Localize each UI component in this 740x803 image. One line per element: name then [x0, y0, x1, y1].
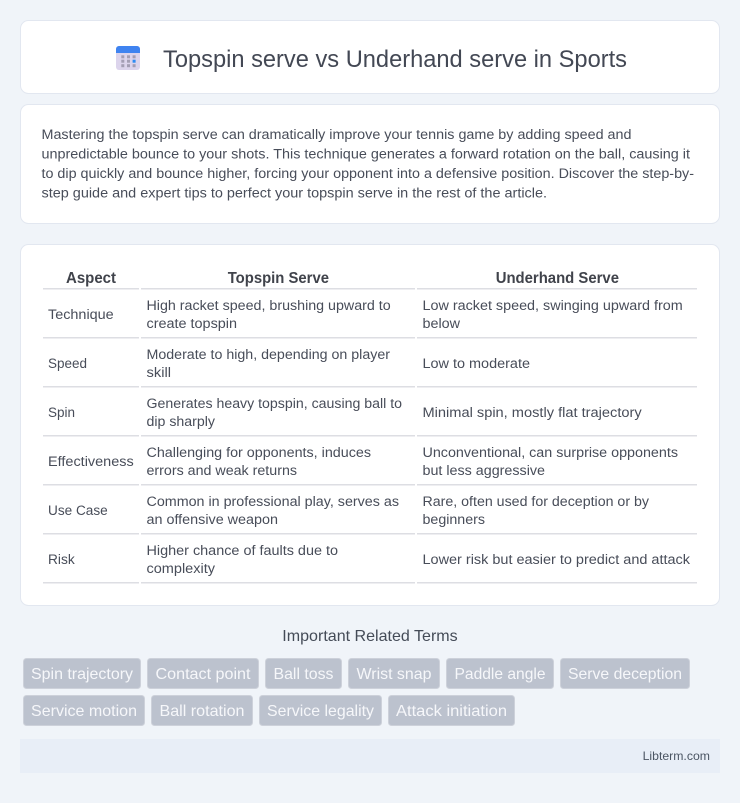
intro paragraph: unpredictable bounce to your shots. This technique generates a forward rotation on the ball, causing it	[42, 146, 690, 162]
heading: related terms: Important Related Terms	[282, 628, 458, 645]
intro paragraph	[42, 127, 694, 202]
row: Spin: Minimal spin, mostly flat trajectory	[422, 405, 643, 421]
row: Speed: Moderate to high, depending on player	[146, 347, 390, 363]
tag: Paddle angle	[446, 658, 554, 688]
row: Technique: Low racket speed, swinging upward from	[422, 298, 683, 314]
tag: Wrist snap	[348, 658, 440, 688]
row: Effectiveness: Challenging for opponents, induces	[146, 445, 371, 461]
intro paragraph: step guide and expert tips to perfect your topspin serve in the rest of the article.	[42, 186, 547, 202]
row: Use Case: Use Case	[48, 503, 108, 519]
row: Use Case: beginners	[422, 512, 485, 528]
row: Speed: Speed	[48, 356, 87, 372]
tag: Spin trajectory	[24, 658, 140, 688]
row: Technique: High racket speed, brushing upward to	[146, 298, 391, 314]
tag: Service legality: Service legality	[267, 703, 374, 720]
row: Technique: below	[422, 316, 461, 332]
intro paragraph: Mastering the topspin serve can dramatically improve your tennis game by adding speed and	[42, 127, 632, 143]
tag: Service motion: Service motion	[31, 703, 137, 720]
row: Effectiveness	[43, 445, 697, 486]
row: Effectiveness: Unconventional, can surprise opponents	[422, 445, 678, 461]
row: Risk	[43, 543, 697, 584]
tag: Ball rotation	[152, 696, 252, 726]
tag: Ball rotation: Ball rotation	[160, 703, 244, 720]
table header row: Topspin Serve	[228, 270, 329, 287]
tag: Wrist snap: Wrist snap	[356, 666, 432, 683]
panel: title header	[20, 20, 720, 94]
panel: comparison table	[20, 244, 720, 606]
tag: Service motion	[24, 696, 144, 726]
tag: Attack initiation: Attack initiation	[396, 703, 507, 720]
tag: Serve deception	[560, 658, 690, 688]
row: Spin: dip sharply	[146, 414, 216, 430]
row: Speed	[43, 347, 697, 388]
row: Use Case	[43, 494, 697, 534]
table header row: Aspect	[66, 270, 117, 287]
row: Speed: skill	[146, 365, 171, 381]
tag: Ball toss	[266, 658, 342, 688]
row: Risk: complexity	[146, 561, 216, 577]
icon: calendar	[116, 46, 140, 70]
row: Risk: Higher chance of faults due to	[146, 543, 338, 559]
footer credit: Libterm.com	[643, 749, 710, 763]
row: Effectiveness: Effectiveness	[48, 454, 134, 470]
row: Technique	[43, 298, 697, 338]
row: Use Case: an offensive weapon	[146, 512, 278, 528]
tag: Spin trajectory: Spin trajectory	[31, 666, 133, 683]
tag: Contact point: Contact point	[156, 666, 251, 683]
tag: Paddle angle: Paddle angle	[454, 666, 546, 683]
row: Use Case: Rare, often used for deception or by	[422, 494, 650, 510]
panel: related term tags	[24, 658, 690, 726]
row: Spin	[43, 396, 697, 436]
table header row	[43, 270, 697, 290]
tag: Ball toss: Ball toss	[274, 666, 334, 683]
row: Technique: create topspin	[146, 316, 237, 332]
row: Risk: Risk	[48, 552, 76, 568]
row: Technique: Technique	[48, 307, 114, 323]
panel: introduction	[20, 104, 720, 224]
row: Effectiveness: but less aggressive	[422, 463, 545, 479]
table header row: Underhand Serve	[496, 270, 619, 287]
tag: Contact point	[148, 658, 258, 688]
intro paragraph: to dip quickly and bounce higher, forcing your opponent into a defensive position. Discover the step-by-	[42, 166, 694, 182]
tag: Serve deception: Serve deception	[568, 666, 682, 683]
row: Risk: Lower risk but easier to predict and attack	[422, 552, 691, 568]
title: Topspin serve vs Underhand serve in Sports	[163, 46, 627, 73]
row: Effectiveness: errors and weak returns	[146, 463, 297, 479]
row: Spin: Generates heavy topspin, causing ball to	[146, 396, 402, 412]
row: Use Case: Common in professional play, serves as	[146, 494, 399, 510]
footer bar	[20, 739, 720, 773]
row: Speed: Low to moderate	[422, 356, 530, 372]
tag: Service legality	[260, 696, 382, 726]
tag: Attack initiation	[388, 696, 514, 726]
row: Spin: Spin	[48, 405, 75, 421]
